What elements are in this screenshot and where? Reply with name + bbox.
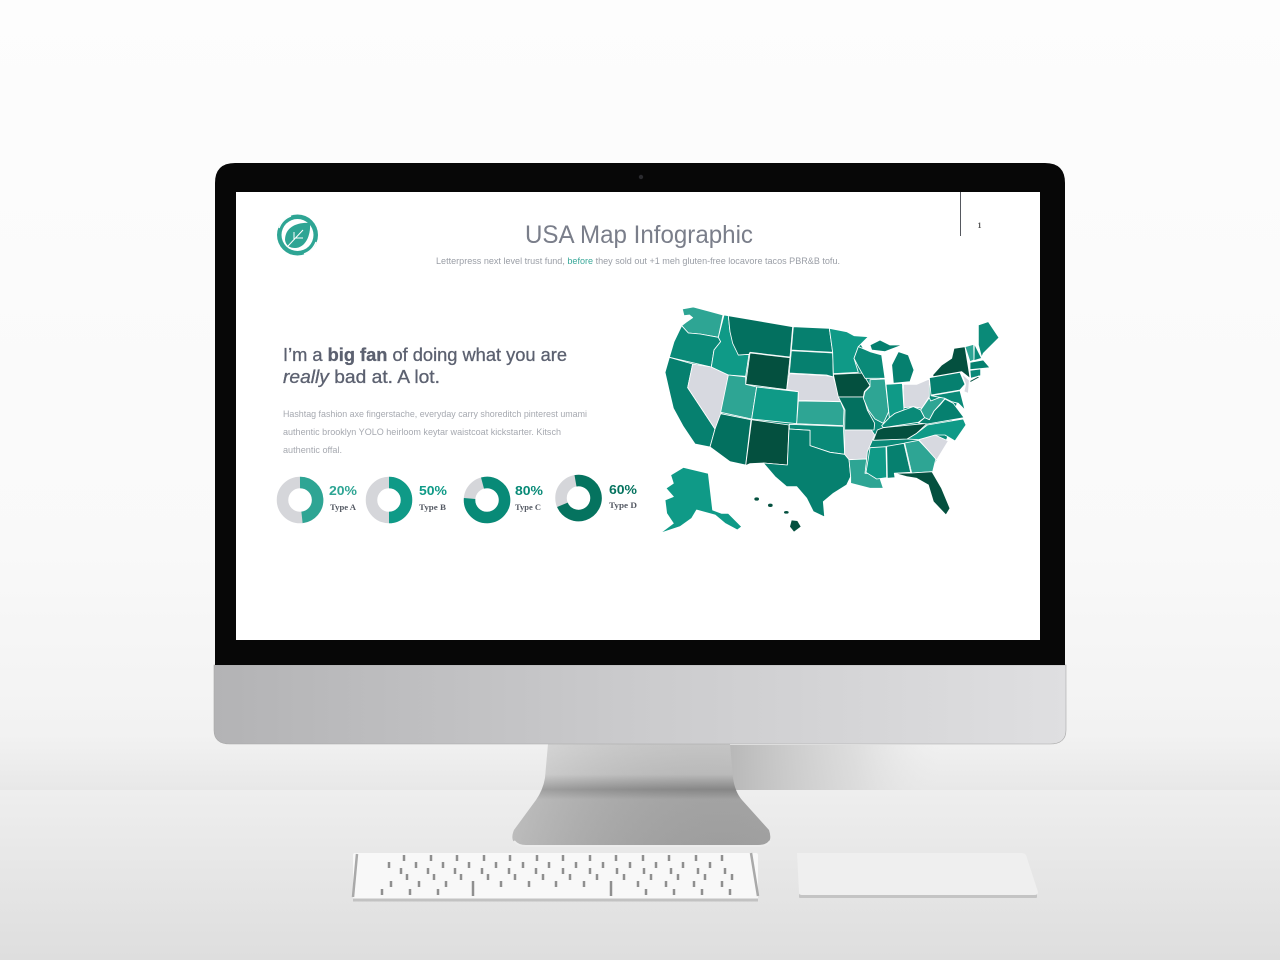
stand shadow on wall [730, 745, 940, 790]
logo: leaf in circle [277, 214, 318, 256]
body text: authentic offal. [283, 445, 342, 456]
screen panel [236, 192, 1040, 640]
heading: I’m a big fan of doing what you are [283, 344, 567, 365]
body text: Hashtag fashion axe fingerstache, everyday carry shoreditch pinterest umami [283, 409, 587, 420]
donut: Type D 60%: 60% [609, 483, 637, 497]
subtitle: Letterpress next level trust fund, before they sold out +1 meh gluten-free locavore tacos PBR&B tofu. [436, 256, 840, 266]
donut: Type C 80%: 80% [515, 484, 543, 498]
choropleth map of USA [660, 307, 999, 533]
page number [960, 192, 982, 236]
trackpad [797, 853, 1038, 898]
page number: 1 [978, 221, 982, 230]
body text [283, 409, 587, 456]
donut: Type C 80%: Type C [515, 503, 541, 512]
donut: Type B 50% [372, 482, 447, 518]
donut: Type B 50%: Type B [419, 503, 447, 512]
body text: authentic brooklyn YOLO heirloom keytar waistcoat kickstarter. Kitsch [283, 427, 561, 438]
heading [283, 344, 567, 387]
donut: Type D 60% [561, 480, 637, 516]
webcam [639, 175, 643, 179]
monitor chin [214, 665, 1066, 744]
donut: Type A 20%: Type A [330, 503, 356, 512]
donut: Type A 20%: 20% [329, 484, 357, 498]
donut: Type C 80% [470, 482, 543, 518]
donut: Type B 50%: 50% [419, 484, 447, 498]
donut: Type A 20% [282, 482, 357, 518]
monitor stand [512, 744, 770, 846]
monitor bezel [215, 163, 1065, 665]
heading: really bad at. A lot. [283, 366, 440, 387]
title: USA Map Infographic [525, 221, 753, 249]
donut: Type D 60%: Type D [609, 501, 637, 510]
keyboard [353, 853, 758, 901]
